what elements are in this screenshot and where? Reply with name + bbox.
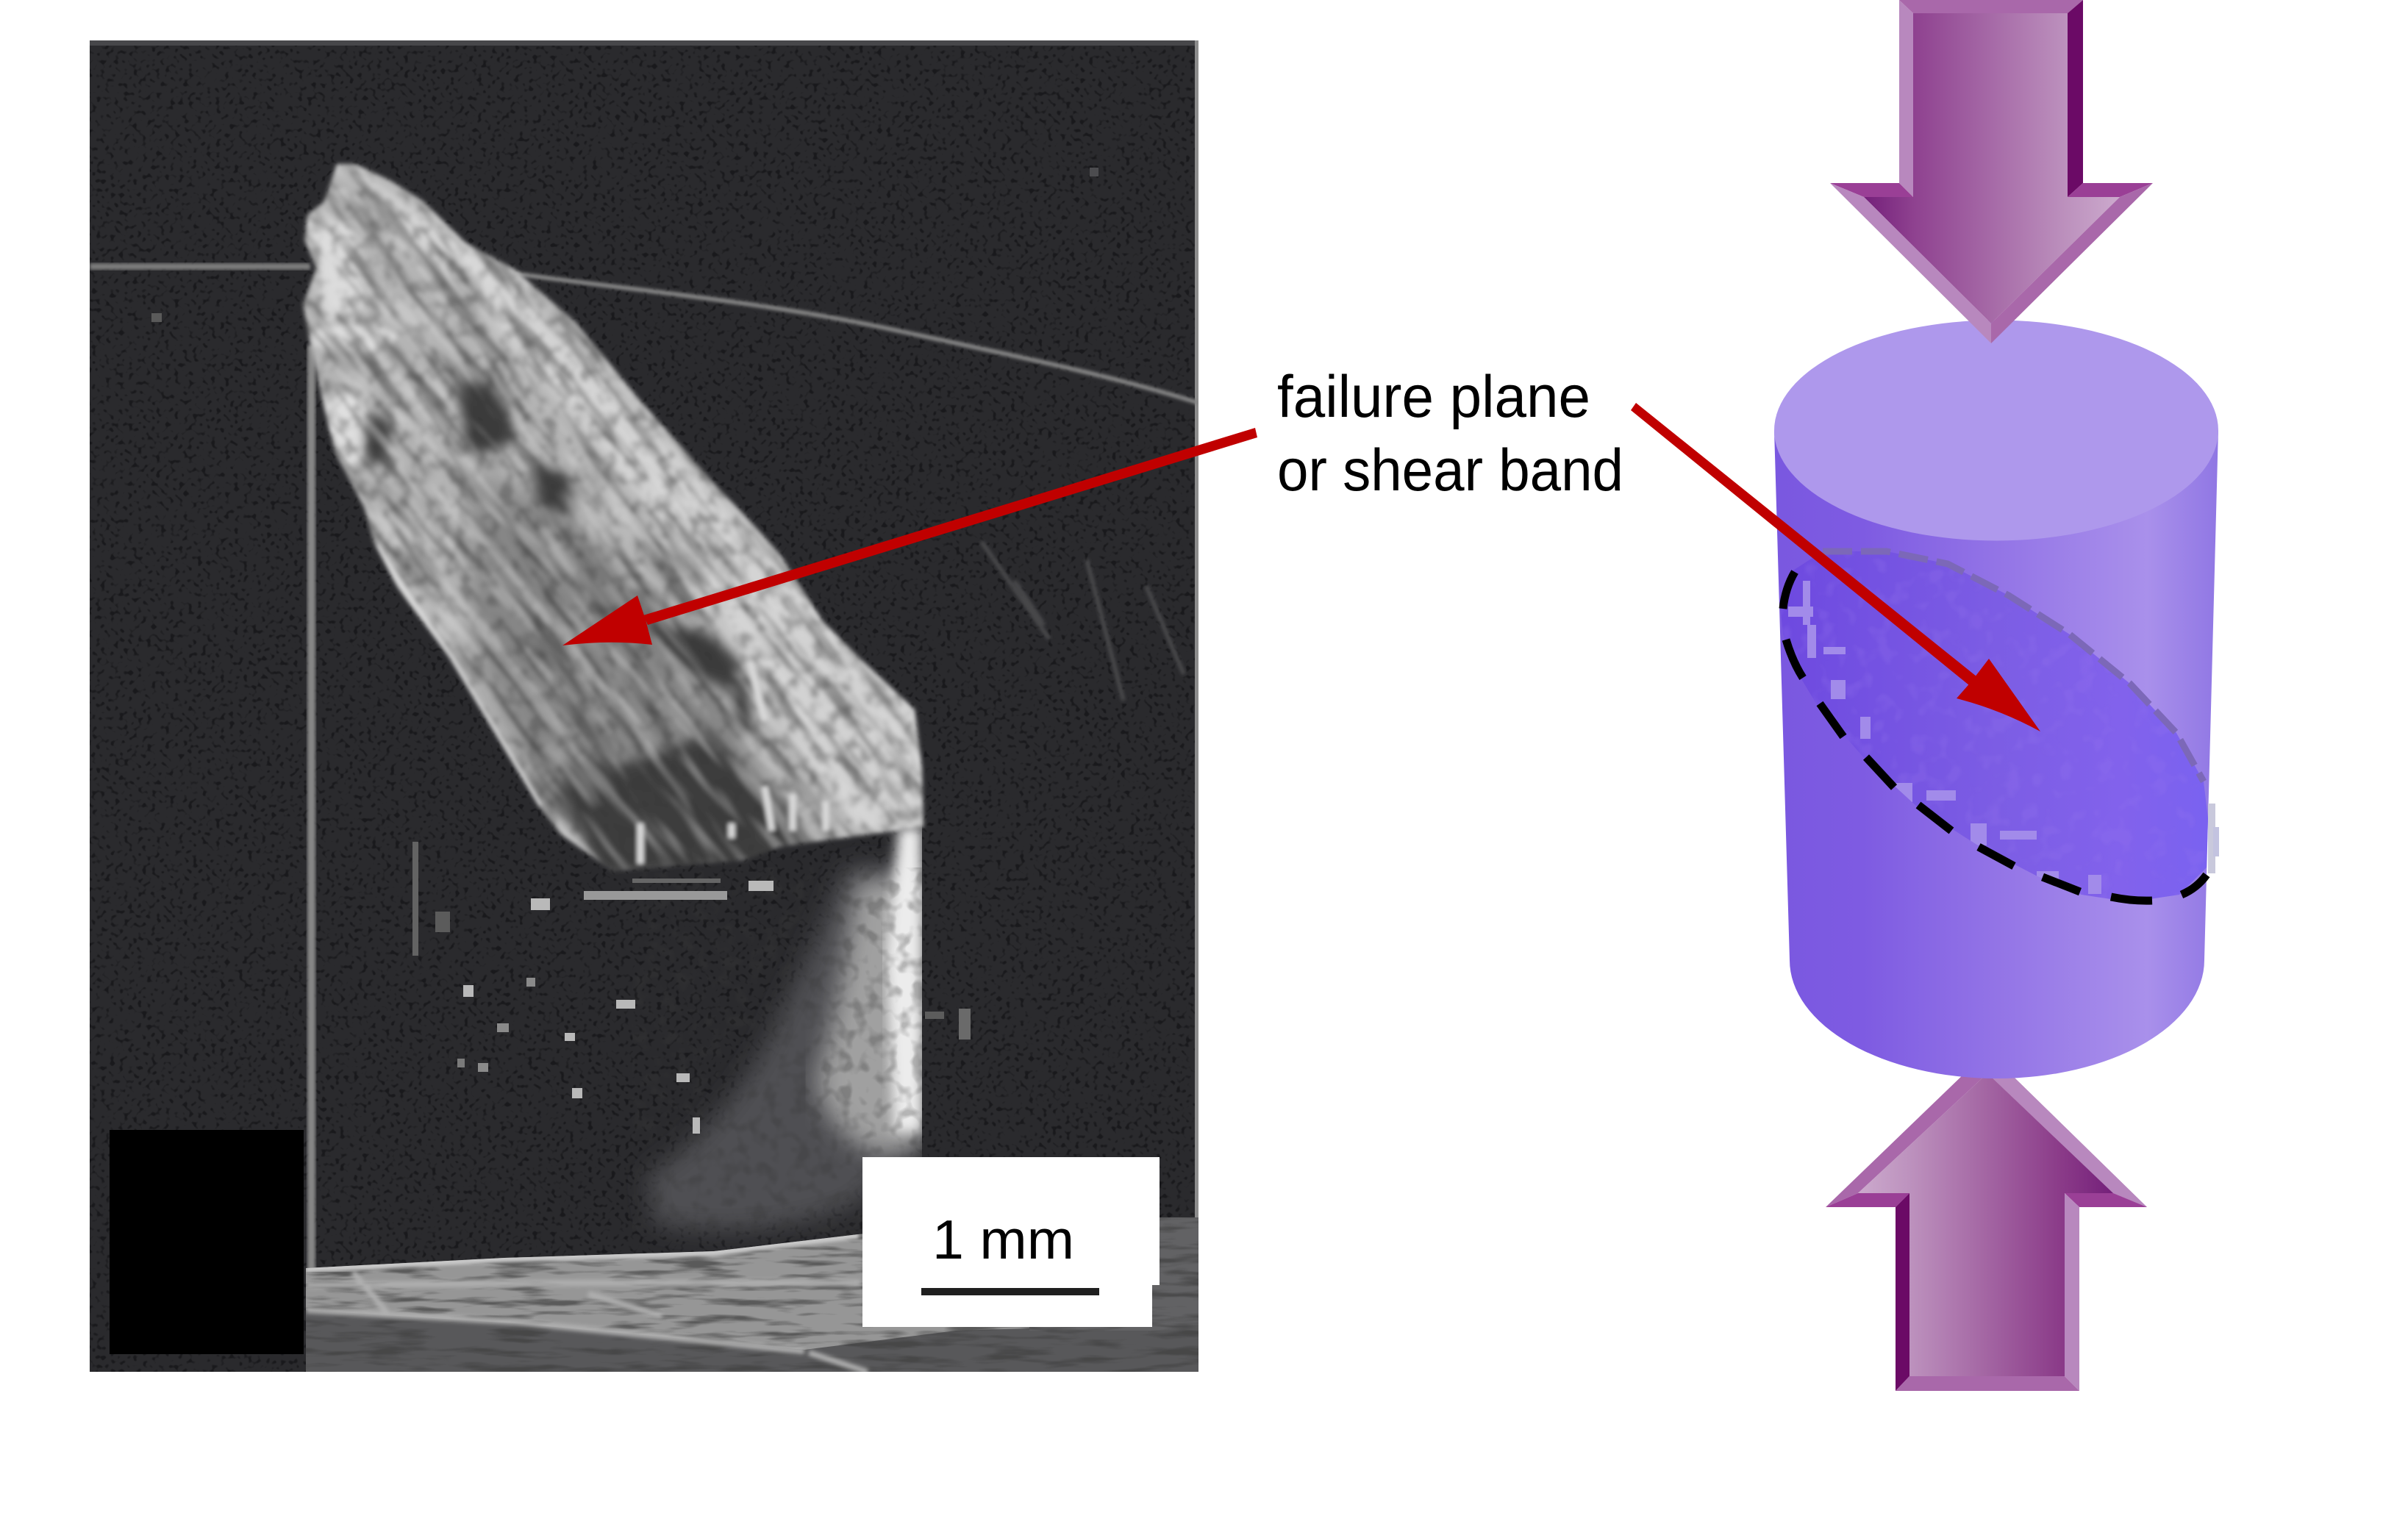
horizontal line: sample jacket left bbox=[90, 263, 310, 270]
bright left lobe bbox=[307, 217, 368, 323]
bright lower right band bbox=[735, 625, 923, 831]
curved line: sample jacket right bbox=[515, 273, 1198, 403]
cylinder specimen bbox=[1774, 321, 2219, 1078]
vertical line: sample jacket edge bbox=[307, 346, 315, 1272]
mottled mid region bbox=[471, 470, 801, 867]
label: failure plane or shear band: failure plane bbox=[1277, 364, 1590, 430]
specks in lower cylinder bbox=[151, 168, 1098, 1134]
dark lower fracture region bbox=[559, 735, 823, 875]
streaky texture bbox=[0, 0, 1414, 1340]
fractured upper fragment bbox=[300, 161, 926, 873]
lower cylinder glow bbox=[632, 827, 926, 1235]
failure plane upper edge bbox=[1823, 551, 2204, 781]
label: failure plane or shear band bbox=[1277, 364, 1623, 504]
scale box bbox=[862, 1157, 1160, 1327]
scale bar bbox=[921, 1288, 1099, 1295]
base plate bbox=[306, 1213, 1203, 1375]
arrow: top compressive force bbox=[1830, 0, 2153, 343]
bright highlights bbox=[375, 546, 826, 864]
cylinder body bbox=[1774, 430, 2218, 1078]
cylinder top face bbox=[1774, 321, 2218, 541]
dark holes bbox=[366, 382, 750, 790]
panel: specimen photograph bbox=[90, 40, 1198, 1372]
faint streaks right of fragment bbox=[982, 542, 1184, 701]
failure plane dashed outline bbox=[1783, 572, 2207, 901]
arrow: bottom compressive force bbox=[1826, 1051, 2147, 1391]
scale label: 1 mm bbox=[932, 1209, 1074, 1270]
arrow: pointer to cylinder failure plane bbox=[1631, 403, 2040, 731]
failure plane ellipse bbox=[1779, 548, 2219, 908]
arrow: pointer to photo fracture bbox=[562, 428, 1257, 645]
label: failure plane or shear band: or shear band bbox=[1277, 437, 1623, 504]
black censor rectangle bbox=[110, 1130, 304, 1354]
bright shear band bbox=[353, 169, 926, 838]
